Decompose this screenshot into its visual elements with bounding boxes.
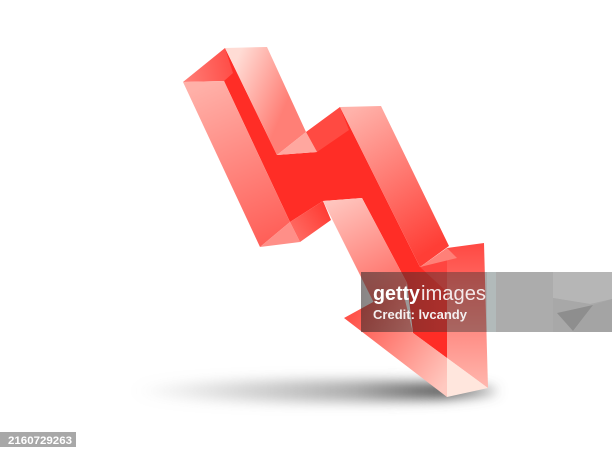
arrow body	[183, 47, 488, 397]
image id label: 2160729263	[8, 435, 72, 447]
main red face	[224, 48, 447, 358]
arrow head shoulder	[420, 258, 447, 292]
middle segment top face	[340, 106, 449, 267]
upper segment left face	[183, 81, 290, 247]
arrow head lower face	[344, 300, 447, 397]
top end cap	[183, 48, 233, 82]
watermark logo: getty	[373, 283, 421, 305]
watermark facets	[487, 272, 553, 332]
image id label	[0, 432, 76, 447]
upper segment top face	[225, 47, 306, 155]
ground shadow	[133, 380, 497, 402]
arrow head right face	[447, 243, 488, 388]
arrow tip white facet	[447, 358, 488, 397]
watermark band	[361, 272, 612, 332]
notch red facet	[306, 107, 349, 152]
lower red underside	[290, 201, 331, 242]
watermark credit: Credit: lvcandy	[373, 308, 467, 322]
bottom cap of upper segment	[260, 222, 300, 247]
notch facet	[277, 132, 317, 155]
arrow head top facet	[420, 248, 457, 267]
lower column light face	[323, 198, 407, 312]
watermark logo: images	[421, 283, 486, 305]
